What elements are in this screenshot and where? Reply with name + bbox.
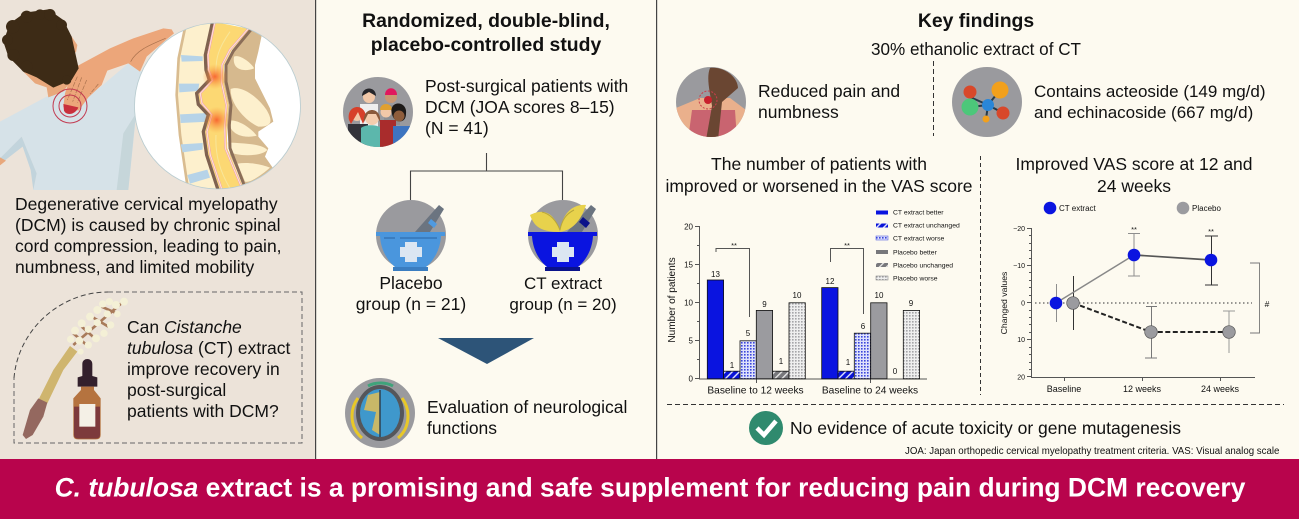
bar values: 10 xyxy=(875,291,884,300)
icon: Cistanche tubulosa plant xyxy=(23,298,128,439)
text: CT extract group xyxy=(509,274,617,314)
randomization tree lines xyxy=(410,153,562,200)
y axis labels xyxy=(1013,226,1025,382)
line chart legend: CT extract xyxy=(1059,204,1097,213)
bars xyxy=(707,280,920,379)
line chart legend: Placebo xyxy=(1192,204,1221,213)
text: reduced pain xyxy=(758,81,900,122)
significance stars xyxy=(731,241,850,250)
heading: study design xyxy=(362,10,610,56)
bar values: 12 xyxy=(826,277,835,286)
icon: CT extract mortar xyxy=(528,200,598,271)
text: reduced pain: Reduced pain and xyxy=(758,81,900,101)
bar values: 1 xyxy=(730,361,735,370)
significance stars: ** xyxy=(844,241,850,250)
icon: dropper bottle xyxy=(73,359,101,439)
icon: safety check mark xyxy=(749,411,783,445)
text: patients: Post-surgical patients with xyxy=(425,76,628,96)
significance marks xyxy=(1131,225,1214,236)
text: placebo group: group (n = 21) xyxy=(356,294,466,314)
y axis labels: 10 xyxy=(684,298,694,308)
text: placebo group: Placebo xyxy=(379,273,443,293)
bar values: 6 xyxy=(861,322,866,331)
heading: key findings: Key findings xyxy=(918,10,1034,32)
text: CT extract group: group (n = 20) xyxy=(509,295,617,314)
text: research question: Can Cistanche xyxy=(127,317,242,337)
CT extract series xyxy=(1050,249,1217,309)
line chart legend xyxy=(1044,202,1221,214)
x axis labels: Baseline to 24 weeks xyxy=(822,386,918,396)
text: evaluation: Evaluation of neurological xyxy=(427,397,627,417)
text: DCM description: (DCM) is caused by chronic spinal xyxy=(15,215,281,235)
bar chart axes xyxy=(695,226,927,383)
footnote: JOA: Japan orthopedic cervical myelopathy treatment criteria. VAS: Visual analog scale xyxy=(905,446,1279,457)
hash bracket: # xyxy=(1265,299,1270,309)
text: evaluation: functions xyxy=(427,418,497,438)
bar values: 9 xyxy=(909,299,914,308)
error bars xyxy=(1056,234,1235,358)
heading: bar chart: improved or worsened in the VAS score xyxy=(665,176,973,196)
line chart: VAS change xyxy=(999,202,1270,394)
text: contents xyxy=(1034,82,1266,122)
icon: brain scan xyxy=(345,378,415,448)
y axis title: Changed values xyxy=(999,271,1009,334)
text: patients xyxy=(425,76,628,138)
bar values xyxy=(711,270,914,376)
bar chart legend: Placebo unchanged xyxy=(893,262,953,270)
text: DCM description: numbness, and limited mobility xyxy=(15,257,255,277)
text: safety statement: No evidence of acute toxicity or gene mutagenesis xyxy=(790,418,1181,438)
significance marks: ** xyxy=(1208,227,1214,236)
heading: bar chart xyxy=(665,154,973,196)
arrow: down to evaluation xyxy=(438,338,534,364)
text: extract type: 30% ethanolic extract of CT xyxy=(871,40,1082,59)
placebo series xyxy=(1067,297,1235,338)
hash bracket xyxy=(1250,263,1270,333)
bar values: 13 xyxy=(711,270,720,279)
x axis labels: Baseline xyxy=(1047,384,1081,394)
panel: study design xyxy=(343,10,628,448)
text: CT extract group: CT extract xyxy=(524,274,602,293)
heading: line chart: 24 weeks xyxy=(1097,176,1171,196)
heading: line chart xyxy=(1015,154,1253,196)
zero reference line xyxy=(1035,302,1252,304)
y axis labels: −10 xyxy=(1013,263,1025,270)
significance marks: ** xyxy=(1131,225,1137,234)
banner: conclusion xyxy=(0,459,1299,519)
illustration: spine cross-section xyxy=(134,22,300,192)
y axis title: Number of patients xyxy=(667,257,678,343)
text: patients: DCM (JOA scores 8–15) xyxy=(425,97,615,117)
dashed question frame xyxy=(14,292,302,443)
bar chart: patients by VAS change xyxy=(667,210,960,396)
bar chart legend: CT extract worse xyxy=(893,236,944,242)
text: reduced pain: numbness xyxy=(758,102,839,122)
y axis labels: −20 xyxy=(1013,226,1025,233)
significance brackets xyxy=(716,248,864,317)
text: contents: Contains acteoside (149 mg/d) xyxy=(1034,82,1266,101)
panel: background and DCM question xyxy=(0,0,315,459)
y axis labels: 0 xyxy=(689,374,694,384)
text: evaluation xyxy=(427,397,627,438)
text: research question: tubulosa (CT) extract xyxy=(127,338,291,358)
x axis labels: Baseline to 12 weeks xyxy=(707,386,804,396)
heading: study design: Randomized, double-blind, xyxy=(362,10,610,32)
text: DCM description: Degenerative cervical myelopathy xyxy=(15,194,278,214)
bar values: 1 xyxy=(846,358,851,367)
banner: conclusion: C. tubulosa extract is a promising and safe supplement for reducing pain during DCM recovery xyxy=(55,472,1246,502)
y axis labels xyxy=(684,222,694,384)
x axis labels: 12 weeks xyxy=(1123,384,1162,394)
bar values: 1 xyxy=(779,357,784,366)
text: DCM description xyxy=(15,194,282,277)
icon: neck pain spot xyxy=(53,89,87,123)
bar values: 9 xyxy=(762,300,767,309)
y axis labels: 10 xyxy=(1017,337,1025,344)
bar chart legend: Placebo better xyxy=(893,250,938,256)
y axis labels: 5 xyxy=(689,336,694,346)
text: patients: (N = 41) xyxy=(425,118,489,138)
icon: neck pain woman xyxy=(676,67,746,140)
bar values: 5 xyxy=(746,329,751,338)
icon: hair xyxy=(2,9,79,88)
illustration: person holding neck xyxy=(0,28,174,190)
text: placebo group xyxy=(356,273,466,314)
x axis labels xyxy=(1047,384,1240,394)
text: research question xyxy=(127,317,291,421)
bar values: 0 xyxy=(893,367,898,376)
text: contents: and echinacoside (667 mg/d) xyxy=(1034,103,1253,122)
bar chart legend: CT extract better xyxy=(893,210,944,216)
heading: bar chart: The number of patients with xyxy=(711,154,927,174)
line chart axes xyxy=(1027,228,1255,381)
x axis labels: 24 weeks xyxy=(1201,384,1240,394)
y axis labels: 20 xyxy=(684,222,694,232)
bar values: 10 xyxy=(793,291,802,300)
text: research question: post-surgical xyxy=(127,380,226,400)
icon: molecule xyxy=(952,67,1022,137)
y axis labels: 0 xyxy=(1021,300,1025,308)
heading: study design: placebo-controlled study xyxy=(371,34,601,56)
heading: line chart: Improved VAS score at 12 and xyxy=(1015,154,1253,174)
significance stars: ** xyxy=(731,241,737,250)
y axis labels: 15 xyxy=(684,260,694,270)
bar chart legend xyxy=(876,210,960,282)
x axis labels xyxy=(707,386,918,396)
icon: placebo mortar xyxy=(376,200,446,271)
text: research question: patients with DCM? xyxy=(127,401,279,421)
bar chart legend: Placebo worse xyxy=(893,276,938,282)
y axis labels: 20 xyxy=(1017,374,1025,382)
text: DCM description: cord compression, leading to pain, xyxy=(15,236,282,256)
text: research question: improve recovery in xyxy=(127,359,280,379)
bar chart legend: CT extract unchanged xyxy=(893,222,960,230)
icon: patient group xyxy=(343,77,413,150)
panel: key findings xyxy=(665,10,1284,457)
